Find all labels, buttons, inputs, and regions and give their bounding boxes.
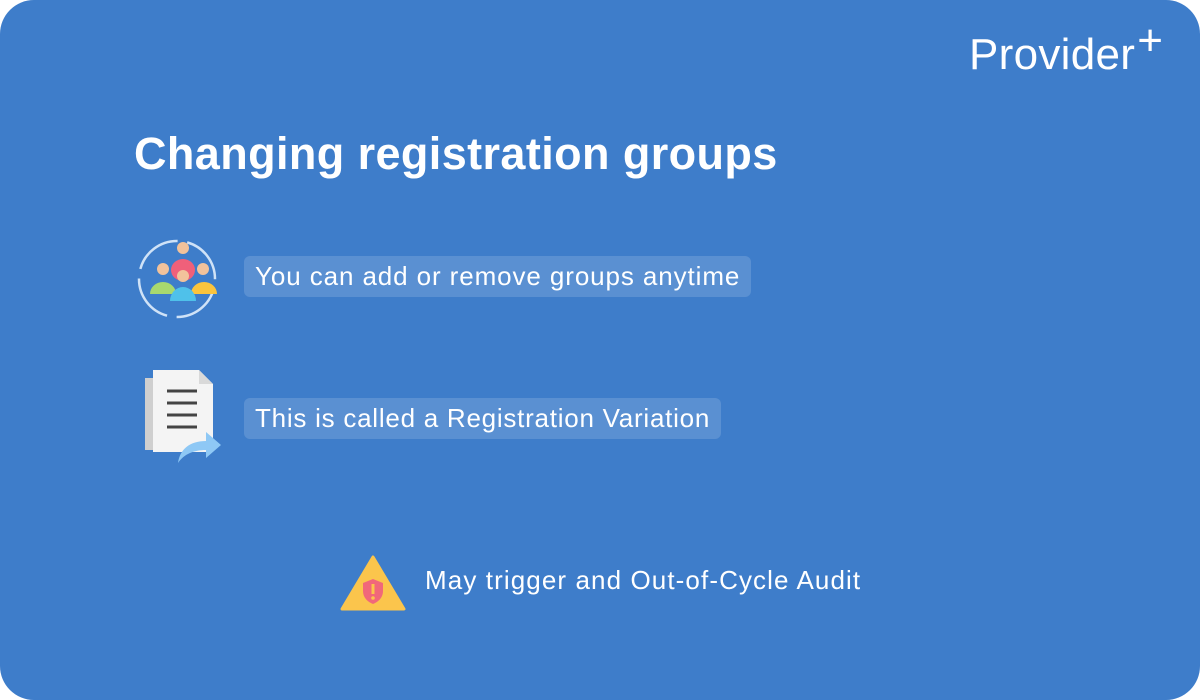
icon: group with cycle arrows <box>138 240 217 318</box>
title: Changing registration groups <box>134 128 778 179</box>
text block: registration variation <box>244 398 721 439</box>
text block: add or remove <box>244 256 751 297</box>
logo: Provider+ <box>969 16 1163 79</box>
icon: warning triangle <box>340 555 406 610</box>
text block: registration variation: This is called a Registration Variation <box>255 403 710 433</box>
text block: audit warning: May trigger and Out-of-Cycle Audit <box>425 565 861 595</box>
icon: document with arrow <box>145 370 221 463</box>
text block: add or remove: You can add or remove groups anytime <box>255 261 740 291</box>
